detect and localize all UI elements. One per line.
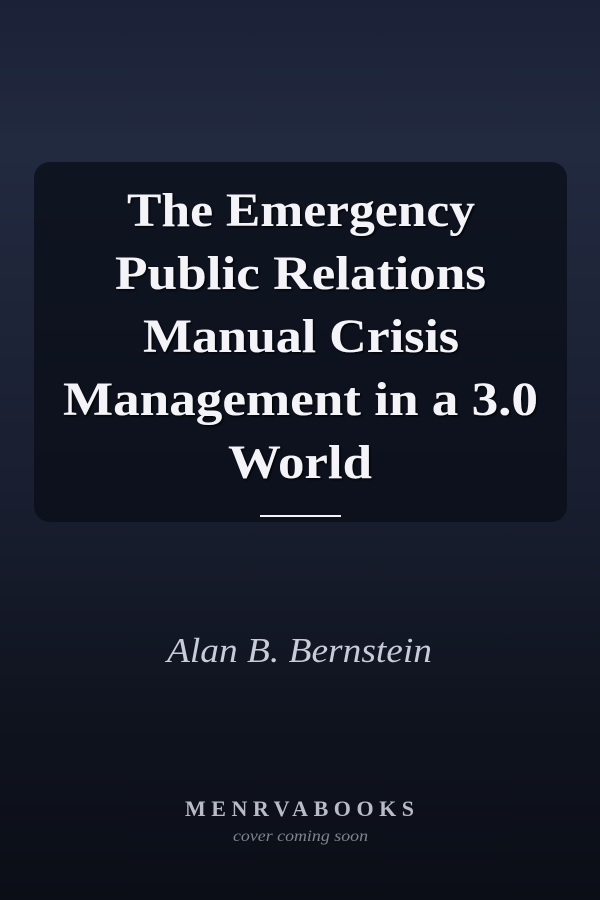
panel: title backdrop <box>34 162 567 522</box>
author: Alan B. Bernstein <box>165 631 432 670</box>
title: The Emergency <box>127 184 475 237</box>
title <box>63 184 538 489</box>
publisher: MENRVABOOKS <box>185 796 414 821</box>
title: Manual Crisis <box>143 310 459 363</box>
title: Management in a 3.0 <box>63 373 538 426</box>
title: World <box>228 436 372 489</box>
tagline: cover coming soon <box>233 828 368 845</box>
title: Public Relations <box>115 247 486 300</box>
divider <box>260 515 341 517</box>
